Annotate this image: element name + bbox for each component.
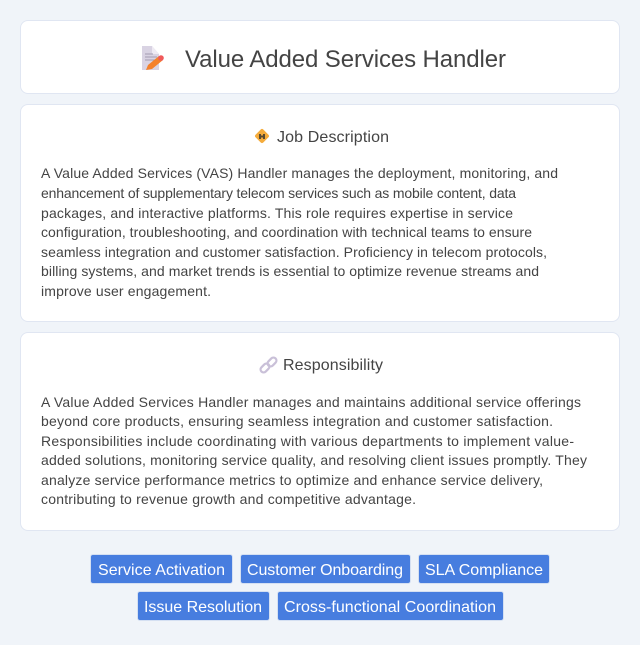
panel: job description bbox=[20, 104, 620, 322]
tag: Cross-functional Coordination bbox=[277, 591, 504, 621]
heading: job description: Job Description bbox=[277, 129, 389, 146]
text: job description body: packages, and interactive platforms. This role requires expertise in service bbox=[41, 205, 513, 221]
panel: title bbox=[20, 20, 620, 94]
tag: Customer Onboarding bbox=[240, 554, 411, 584]
text: responsibility body: added solutions, monitoring service quality, and resolving client issues promptly. They bbox=[41, 452, 587, 468]
text: job description body: seamless integration and customer satisfaction. Proficiency in telecom protocols, bbox=[41, 244, 547, 260]
tag: SLA Compliance bbox=[418, 554, 550, 584]
text: responsibility body: contributing to revenue growth and competitive advantage. bbox=[41, 491, 416, 507]
tag: Issue Resolution bbox=[137, 591, 270, 621]
tag labels bbox=[98, 562, 543, 616]
text: responsibility body: A Value Added Services Handler manages and maintains additional service offerings bbox=[41, 394, 581, 410]
text: responsibility body: Responsibilities include coordinating with various departments to implement value- bbox=[41, 433, 574, 449]
tag labels: Issue Resolution bbox=[144, 599, 262, 616]
text: job description body: configuration, troubleshooting, and coordination with technical teams to ensure bbox=[41, 224, 532, 240]
text: job description body: billing systems, and market trends is essential to optimize revenue streams and bbox=[41, 263, 539, 279]
panel: responsibility bbox=[20, 332, 620, 531]
text: job description body bbox=[41, 165, 558, 299]
text: job description body: improve user engagement. bbox=[41, 283, 211, 299]
text: responsibility body: beyond core products, ensuring seamless integration and customer satisfaction. bbox=[41, 413, 553, 429]
text: responsibility body: analyze service performance metrics to optimize and enhance service delivery, bbox=[41, 472, 543, 488]
tag labels: Cross-functional Coordination bbox=[284, 599, 496, 616]
icon: document with pencil bbox=[142, 46, 164, 70]
tag labels: SLA Compliance bbox=[425, 562, 543, 579]
tag: Service Activation bbox=[90, 554, 233, 584]
tag labels: Customer Onboarding bbox=[247, 562, 403, 579]
text: job description body: enhancement of supplementary telecom services such as mobile content, data bbox=[41, 185, 516, 201]
heading: responsibility: Responsibility bbox=[283, 357, 383, 374]
title: Value Added Services Handler bbox=[185, 46, 506, 73]
text: job description body: A Value Added Services (VAS) Handler manages the deployment, monitoring, and bbox=[41, 165, 558, 181]
text: responsibility body bbox=[41, 394, 587, 507]
icon: diamond sign bbox=[254, 128, 270, 144]
icon: link bbox=[259, 356, 278, 374]
tag labels: Service Activation bbox=[98, 562, 225, 579]
